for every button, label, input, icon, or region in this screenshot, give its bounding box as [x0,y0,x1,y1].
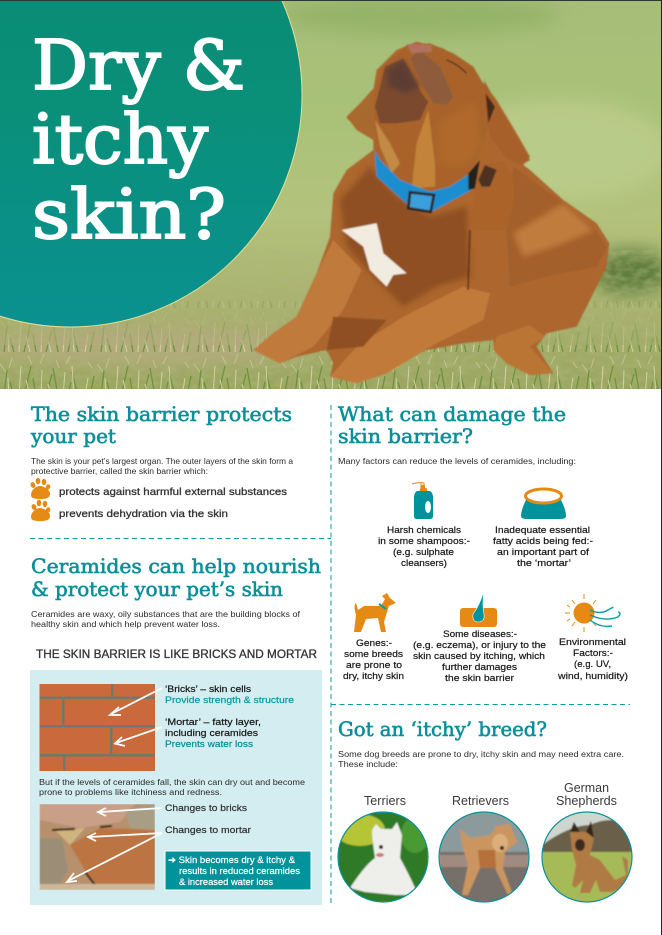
ceramides text [31,609,301,629]
heading: ceramides: & protect your pet’s skin [31,577,283,601]
breed intro: These include: [338,759,398,769]
callout: ➔ Skin becomes dry & itchy & [168,855,296,866]
text: ceramides fall: But if the levels of ceramides fall, the skin can dry out and become [39,777,305,787]
heading: itchy breed: Got an ‘itchy’ breed? [338,717,547,741]
raised leg [470,162,513,230]
text: fatty acids [493,525,593,569]
label: changes to mortar: Changes to mortar [165,825,252,836]
text: environmental: wind, humidity) [557,671,628,682]
bullet: prevents: prevents dehydration via the skin [59,508,228,520]
callout: & increased water loss [179,877,273,888]
heading: ceramides [31,554,321,601]
breed intro: Some dog breeds are prone to dry, itchy skin and may need extra care. [338,749,624,759]
label: changes to bricks: Changes to bricks [165,803,247,814]
icon: dog bowl [521,489,566,519]
ceramides text: healthy skin and which help prevent water loss. [31,619,220,629]
icon: sun and wind [565,594,620,632]
text: diseases: Some diseases:- [443,629,517,640]
title: itchy [32,101,209,180]
head [405,42,482,82]
icon: shampoo bottle [412,483,433,519]
text: diseases [413,629,546,684]
text: harsh chemicals: Harsh chemicals [387,525,461,536]
label: bricks: ‘Bricks’ – skin cells [165,684,251,695]
text: environmental: Factors:- [573,648,613,659]
label: mortar: Prevents water loss [165,739,253,750]
text: harsh chemicals: (e.g. sulphate [393,547,454,558]
callout [165,851,311,890]
intro text: The skin is your pet’s largest organ. The outer layers of the skin form a [31,456,293,466]
bullet: protects: protects against harmful external substances [59,486,287,498]
title: skin? [32,176,226,255]
text: harsh chemicals: in some shampoos:- [378,536,470,547]
label: mortar: ‘Mortar’ – fatty layer, [165,717,261,728]
text: environmental [557,637,628,682]
top edge [0,0,662,1]
icon: paw 1 [30,478,51,499]
label: bricks [165,684,294,706]
text: ceramides fall: prone to problems like itchiness and redness. [39,787,222,797]
text: fatty acids: an important part of [497,547,589,558]
photo: healthy bricks [40,684,155,771]
text: environmental: Environmental [559,637,626,648]
title [32,27,245,255]
green title circle [0,0,302,327]
intro text: protective barrier, called the skin barrier which: [31,466,208,476]
photo: terrier [335,812,429,902]
text: genes [343,638,404,682]
heading: damage: What can damage the [338,402,566,426]
ceramides text: Ceramides are waxy, oily substances that are the building blocks of [31,609,301,619]
panel: what can damage [338,402,628,684]
label: german shepherds [556,780,617,808]
arrows: bricks and mortar [110,688,162,746]
subheading: bricks and mortar: THE SKIN BARRIER IS LIKE BRICKS AND MORTAR [36,647,317,661]
icon: hair follicle [460,590,497,627]
left ear [346,88,374,121]
text: ceramides fall [39,777,305,797]
label: retrievers: Retrievers [452,793,509,808]
breed intro [338,749,624,769]
collar [374,150,480,212]
text: environmental: (e.g. UV, [574,659,611,670]
callout: results in reduced ceramides [179,866,300,877]
hero photo: dog scratching on grass [0,0,662,389]
heading: damage [338,402,566,448]
text: diseases: (e.g. eczema), or injury to the [413,640,546,651]
label: mortar [165,717,261,750]
photo: damaged bricks [40,804,155,890]
text: harsh chemicals: cleansers) [401,558,447,569]
text: genes: some breeds [344,649,403,660]
text: fatty acids: Inadequate essential [495,525,590,536]
heading: skin barrier [30,402,292,448]
section dividers [30,405,630,905]
text: genes: dry, itchy skin [343,671,404,682]
icon: dog [354,593,396,632]
label: mortar: including ceramides [165,728,258,739]
label: terriers: Terriers [364,793,406,808]
dog [253,42,609,383]
label: german shepherds: Shepherds [556,793,617,808]
text: harsh chemicals [378,525,470,569]
heading: skin barrier: The skin barrier protects [31,402,292,426]
text: diseases: further damages [442,662,517,673]
text: fatty acids: the ‘mortar’ [517,558,571,569]
white chest patch [342,223,407,287]
text: genes: are prone to [346,660,402,671]
label: german shepherds: German [564,780,609,795]
text: genes: Genes:- [356,638,392,649]
heading: ceramides: Ceramides can help nourish [31,554,321,578]
right page edge [661,0,662,935]
panel: itchy breed [335,717,632,902]
title: Dry & [32,27,245,106]
text: fatty acids: fatty acids being fed:- [493,536,593,547]
icon: paw 2 [31,500,51,521]
right ear [484,80,530,165]
text: diseases: the skin barrier [445,673,515,684]
heading: skin barrier: your pet [30,424,116,448]
heading: damage: skin barrier? [338,424,473,448]
panel: bricks and mortar [30,670,322,905]
damage intro: Many factors can reduce the levels of ceramides, including: [338,456,576,466]
label: bricks: Provide strength & structure [165,695,294,706]
photo: retriever [439,812,529,902]
text: diseases: skin caused by itching, which [413,651,545,662]
intro text [31,456,293,476]
arrows: changes [67,808,162,882]
photo: german shepherd [542,812,632,902]
panel: skin barrier protects [30,402,293,521]
